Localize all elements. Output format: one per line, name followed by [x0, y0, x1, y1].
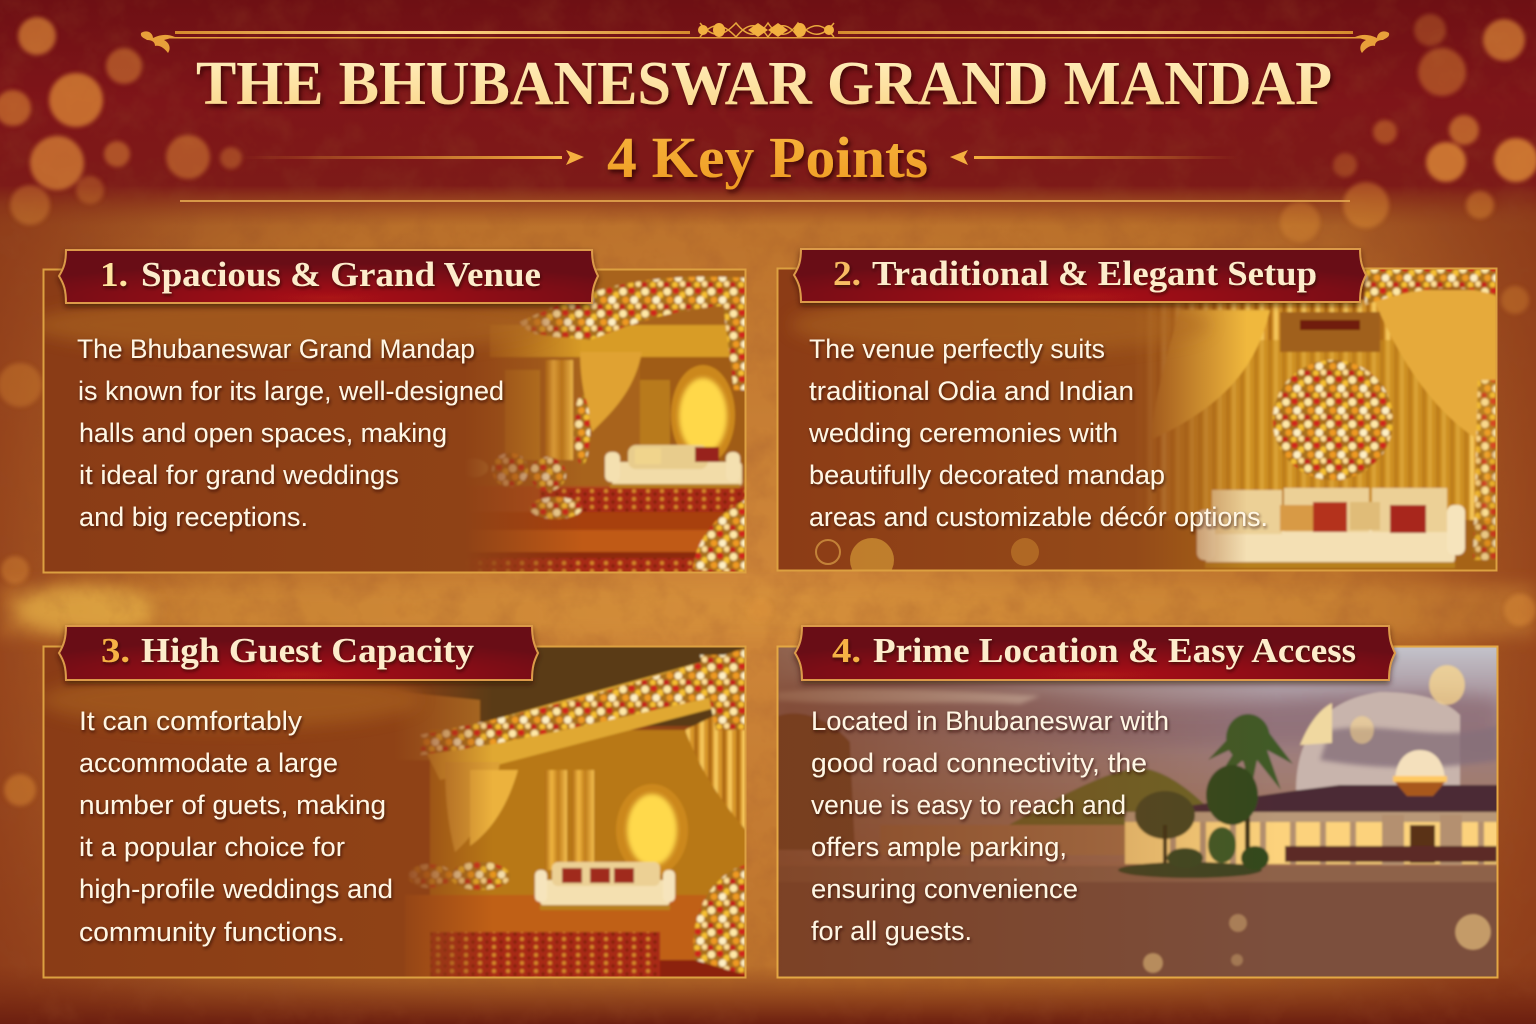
panel 2 body text — [808, 334, 1268, 532]
panel 4 body text: venue is easy to reach and — [811, 790, 1126, 820]
panel 2 photo: draped stage — [777, 268, 1497, 582]
panel 1 body text: is known for its large, well-designed — [78, 376, 504, 406]
panel 1 heading banner: 1. — [100, 255, 128, 294]
panel 4 heading banner: 4. — [832, 631, 861, 670]
sofa — [605, 445, 742, 488]
panel 4 body text: for all guests. — [811, 916, 972, 946]
panel 1 body text: The Bhubaneswar Grand Mandap — [77, 334, 475, 364]
panel 2 heading banner: Traditional & Elegant Setup — [872, 254, 1317, 293]
palm trees — [1135, 714, 1293, 870]
bokeh lights — [0, 14, 1536, 806]
panel 1 heading banner — [59, 250, 598, 303]
panel 3 body text: number of guets, making — [79, 790, 386, 820]
panel 4 body text: ensuring convenience — [811, 874, 1078, 904]
panel 3 body text: community functions. — [79, 917, 345, 947]
arrow: left of subtitle — [240, 150, 584, 165]
panel 3 body text — [79, 706, 393, 947]
panel 1 body text: halls and open spaces, making — [79, 418, 447, 448]
panel 2 body text: The venue perfectly suits — [809, 334, 1105, 364]
panel 4 photo: venue exterior at dusk — [777, 646, 1498, 978]
ornament: right corner flourish — [1355, 31, 1389, 53]
venue building — [1125, 750, 1498, 865]
sofa — [535, 862, 675, 910]
panel 3: high guest capacity — [40, 626, 746, 978]
panel 2 body text: beautifully decorated mandap — [809, 460, 1165, 490]
ornament: left corner flourish — [141, 31, 175, 53]
panel 1 heading banner: Spacious & Grand Venue — [141, 255, 541, 294]
arrow: right of subtitle — [950, 150, 1240, 165]
panel 1: spacious and grand venue — [30, 250, 746, 573]
panel 2 heading banner: 2. — [833, 254, 861, 293]
panel 4: prime location and easy access — [777, 626, 1498, 978]
panel 4 body text: Located in Bhubaneswar with — [811, 706, 1169, 736]
panel 2: traditional and elegant setup — [777, 249, 1497, 582]
header bottom rule — [180, 200, 1350, 202]
panel 2 body text: traditional Odia and Indian — [809, 376, 1134, 406]
panel 3 heading banner: High Guest Capacity — [141, 631, 475, 670]
panel 4 body text — [811, 706, 1169, 946]
panel 3 heading banner — [59, 626, 538, 680]
panel 2 body text: areas and customizable décór options. — [809, 502, 1268, 532]
subtitle: 4 Key Points — [607, 125, 928, 190]
panel 1 photo: mandap interior — [30, 269, 746, 573]
panel 1 body text: and big receptions. — [79, 502, 308, 532]
header ornament: top rule — [141, 23, 1389, 53]
panel 2 heading banner — [794, 249, 1366, 302]
panel 4 body text: good road connectivity, the — [811, 748, 1147, 778]
panel 3 body text: it a popular choice for — [79, 832, 345, 862]
panel 2 body text: wedding ceremonies with — [808, 418, 1118, 448]
panel 3 body text: It can comfortably — [79, 706, 303, 736]
panel 1 body text — [77, 334, 504, 532]
title: THE BHUBANESWAR GRAND MANDAP — [196, 50, 1332, 118]
panel 3 body text: high-profile weddings and — [79, 874, 393, 904]
panel 3 body text: accommodate a large — [79, 748, 338, 778]
panel 4 heading banner — [795, 626, 1395, 680]
panel 3 heading banner: 3. — [101, 631, 130, 670]
panel 4 body text: offers ample parking, — [811, 832, 1067, 862]
panel 3 photo: hall with garlands — [40, 646, 746, 978]
panel 1 body text: it ideal for grand weddings — [79, 460, 399, 490]
sofa — [1197, 488, 1465, 568]
panel 4 heading banner: Prime Location & Easy Access — [873, 631, 1356, 670]
